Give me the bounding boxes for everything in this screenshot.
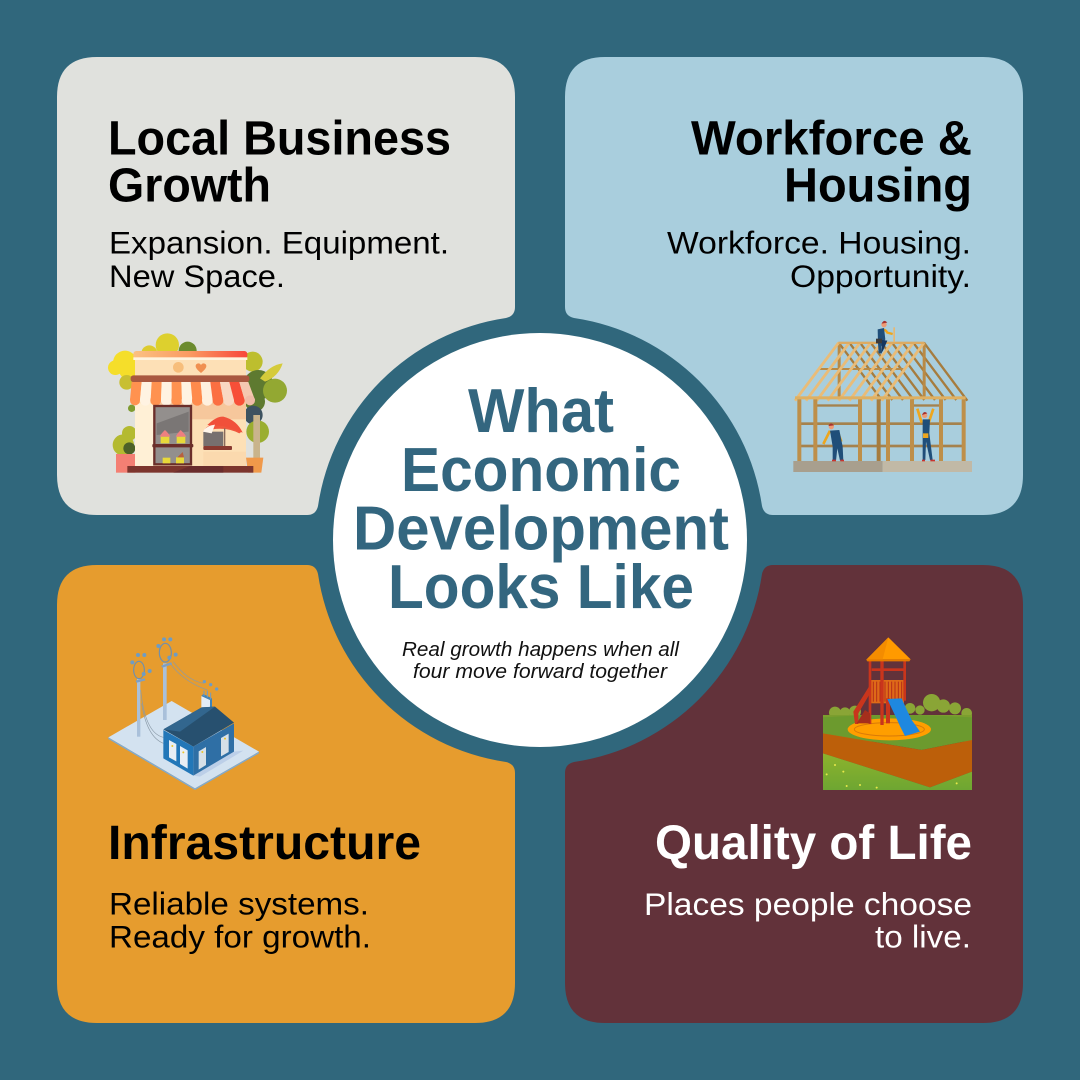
description: Opportunity.: [790, 258, 971, 294]
heading: Local Business: [108, 112, 451, 166]
white disc: [333, 333, 747, 747]
center circle: [333, 333, 747, 747]
heading: Growth: [108, 160, 271, 212]
worker bending: [823, 423, 844, 461]
icon: electrical substation: [108, 637, 259, 790]
heading: Infrastructure: [108, 817, 421, 870]
heading: [691, 112, 972, 212]
icon: house frame under construction: [793, 321, 972, 472]
panel: infrastructure: [57, 565, 515, 1023]
description: [109, 886, 371, 954]
description: Ready for growth.: [109, 918, 371, 954]
description: [109, 224, 449, 294]
panel: workforce and housing: [565, 57, 1023, 515]
title: Development: [353, 494, 729, 564]
worker on roof: [876, 321, 893, 354]
heading: Housing: [784, 160, 972, 212]
heading: Workforce &: [691, 112, 972, 166]
icon: playground: [823, 637, 972, 790]
description: to live.: [875, 918, 971, 954]
description: Workforce. Housing.: [667, 224, 971, 260]
tagline: four move forward together: [413, 660, 668, 683]
panel: local business growth: [57, 57, 515, 515]
title: [353, 377, 729, 622]
description: Reliable systems.: [109, 886, 369, 922]
description: [667, 224, 971, 294]
description: [644, 886, 972, 954]
title: Looks Like: [388, 553, 694, 622]
panel shape: grey card: [57, 57, 515, 515]
panel shape: light blue card: [565, 57, 1023, 515]
tagline: Real growth happens when all: [402, 638, 680, 661]
description: Places people choose: [644, 886, 972, 922]
panel: quality of life: [565, 565, 1023, 1023]
heading: Quality of Life: [655, 817, 972, 870]
title: What: [468, 377, 614, 446]
worker lifting beam: [917, 409, 935, 461]
title: Economic: [401, 436, 681, 505]
description: New Space.: [109, 258, 285, 294]
tagline: [402, 638, 680, 683]
icon: storefront: [108, 333, 287, 473]
panel shape: maroon card: [565, 565, 1023, 1023]
panel shape: orange card: [57, 565, 515, 1023]
heading: [108, 112, 451, 212]
description: Expansion. Equipment.: [109, 224, 449, 260]
